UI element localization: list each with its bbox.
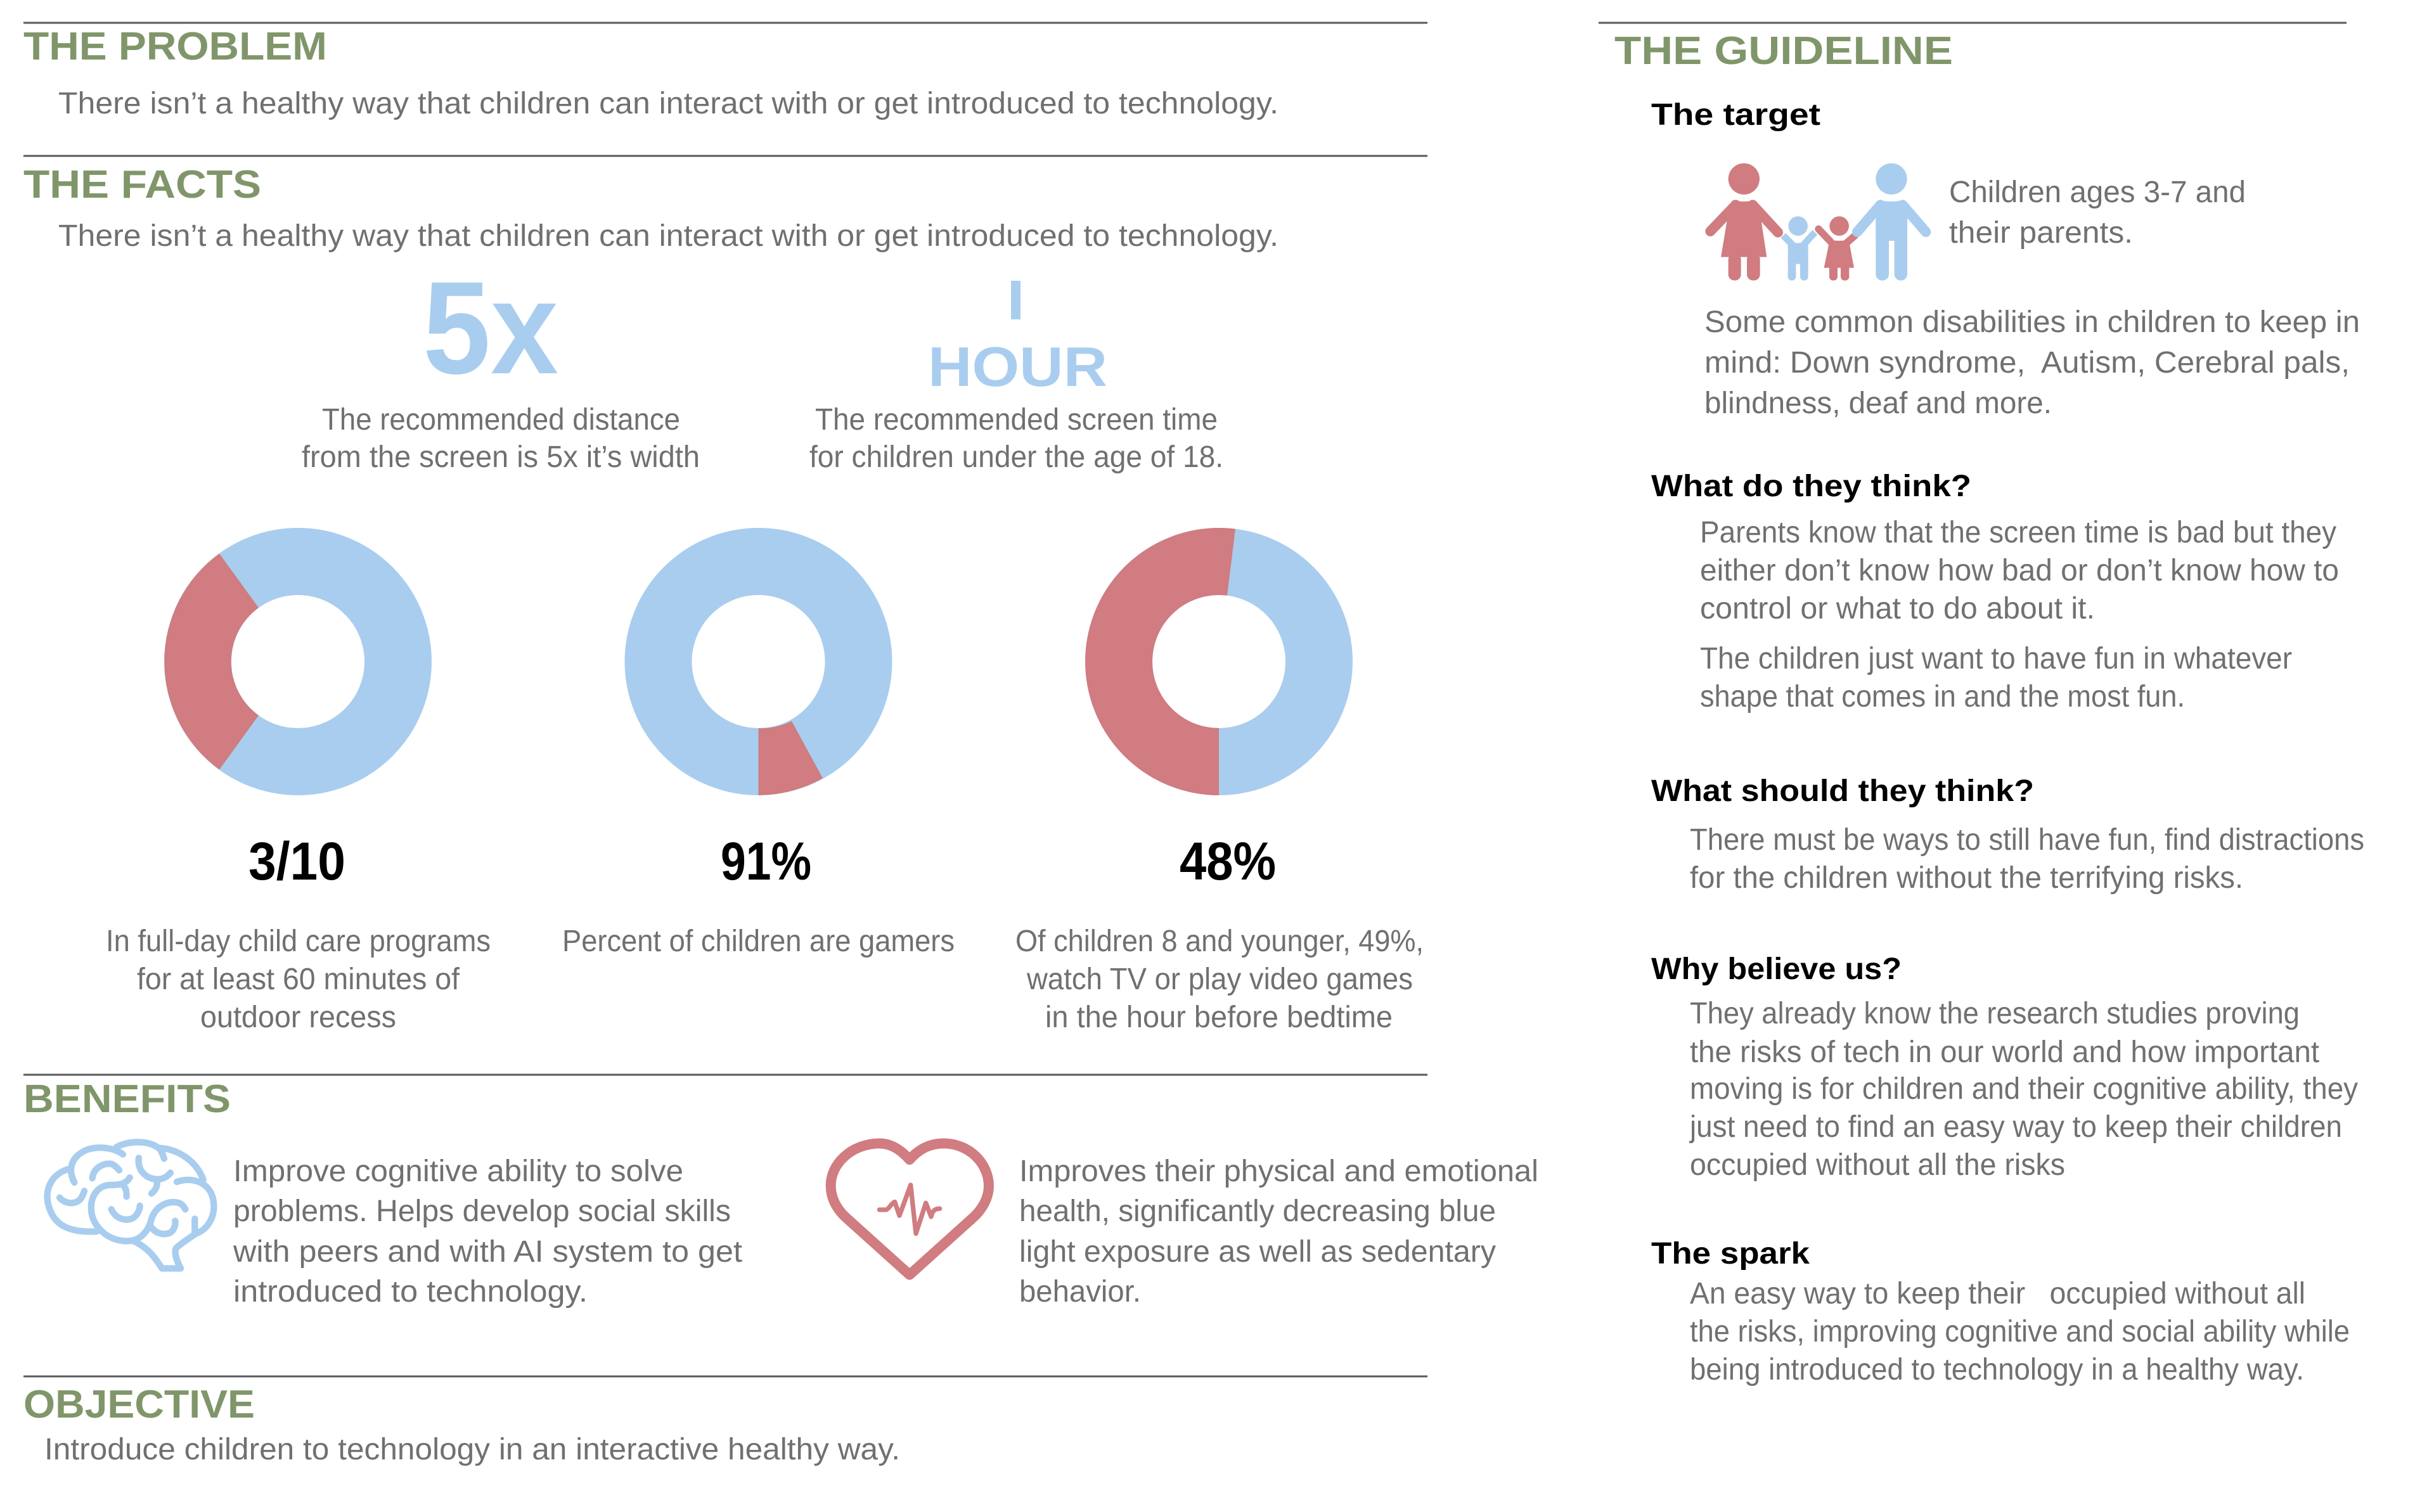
- parents think text: Parents know that the screen time is bad but they: [1700, 516, 2336, 549]
- donut chart: 48%: [1085, 528, 1319, 795]
- parents think text: either don’t know how bad or don’t know how to: [1700, 554, 2339, 587]
- screen time caption: The recommended screen time: [815, 403, 1218, 437]
- subheading: why believe us: Why believe us?: [1651, 952, 1902, 986]
- why believe us text: [1689, 997, 2358, 1182]
- target audience text: their parents.: [1949, 216, 2133, 250]
- donut chart: 91%: [658, 561, 858, 795]
- distance caption: [302, 403, 700, 474]
- donut chart: 3/10: [164, 554, 398, 769]
- why believe us text: occupied without all the risks: [1690, 1148, 2065, 1182]
- screen time caption: for children under the age of 18.: [809, 440, 1223, 474]
- benefit text: cognitive: with peers and with AI system to get: [233, 1235, 742, 1269]
- stat: 3/10: 3/10: [248, 831, 345, 891]
- the spark text: An easy way to keep their occupied without all: [1690, 1277, 2305, 1310]
- why believe us text: the risks of tech in our world and how important: [1690, 1035, 2319, 1069]
- screen time caption: [809, 403, 1223, 474]
- disabilities text: blindness, deaf and more.: [1704, 387, 2052, 420]
- target audience text: [1949, 176, 2246, 250]
- panel: the guideline: [1614, 29, 2364, 1387]
- the spark text: being introduced to technology in a healthy way.: [1690, 1353, 2304, 1387]
- icon: brain: [48, 1142, 214, 1269]
- heading: objective: OBJECTIVE: [23, 1383, 255, 1426]
- what should they think text: [1690, 823, 2364, 895]
- icon: heart with pulse: [831, 1143, 989, 1275]
- subheading: the target: The target: [1651, 98, 1820, 132]
- what should they think text: for the children without the terrifying risks.: [1690, 861, 2243, 895]
- objective statement: Introduce children to technology in an interactive healthy way.: [44, 1433, 900, 1466]
- benefit text: health: behavior.: [1019, 1275, 1141, 1309]
- target audience text: Children ages 3-7 and: [1949, 176, 2246, 209]
- subheading: what should they think: What should they think?: [1651, 774, 2034, 808]
- icon: family: [1710, 163, 1926, 281]
- benefit text: health: [1019, 1155, 1538, 1309]
- why believe us text: moving is for children and their cognitive ability, they: [1690, 1072, 2358, 1106]
- panel: the facts: [23, 163, 1424, 1034]
- caption: bedtime: watch TV or play video games: [1026, 963, 1413, 996]
- heading: benefits: BENEFITS: [23, 1077, 231, 1121]
- heading: the guideline: THE GUIDELINE: [1614, 29, 1953, 73]
- subheading: the spark: The spark: [1651, 1237, 1810, 1271]
- caption: bedtime: Of children 8 and younger, 49%,: [1015, 925, 1424, 958]
- disabilities text: mind: Down syndrome, Autism, Cerebral pals,: [1704, 346, 2350, 380]
- children think text: [1700, 642, 2292, 714]
- heading: the problem: THE PROBLEM: [23, 25, 327, 68]
- benefit text: cognitive: problems. Helps develop social skills: [233, 1195, 731, 1228]
- panel: objective: [23, 1383, 900, 1466]
- the spark text: the risks, improving cognitive and social ability while: [1690, 1315, 2350, 1349]
- disabilities text: Some common disabilities in children to keep in: [1704, 305, 2360, 339]
- big word hour: HOUR: [928, 335, 1107, 398]
- caption: recess: [106, 925, 491, 1034]
- disabilities text: [1704, 305, 2360, 420]
- parents think text: control or what to do about it.: [1700, 592, 2095, 625]
- distance caption: The recommended distance: [322, 403, 680, 437]
- distance caption: from the screen is 5x it’s width: [302, 440, 700, 474]
- children think text: The children just want to have fun in whatever: [1700, 642, 2292, 676]
- heading: the facts: THE FACTS: [23, 163, 261, 207]
- benefit text: health: light exposure as well as sedentary: [1019, 1235, 1496, 1269]
- why believe us text: They already know the research studies proving: [1690, 997, 2300, 1030]
- big number 1: 1: [994, 266, 1034, 347]
- caption: bedtime: [1015, 925, 1424, 1034]
- problem statement: There isn’t a healthy way that children can interact with or get introduced to technology.: [58, 87, 1278, 120]
- benefit text: health: health, significantly decreasing blue: [1019, 1195, 1496, 1228]
- facts intro: There isn’t a healthy way that children can interact with or get introduced to technology.: [58, 219, 1278, 253]
- caption: recess: outdoor recess: [200, 1001, 396, 1034]
- benefit text: cognitive: [233, 1155, 742, 1309]
- stat: 48%: 48%: [1180, 831, 1276, 891]
- panel: benefits: [23, 1077, 1538, 1309]
- stat: 5x distance: [302, 255, 700, 474]
- stat: 1 hour: [809, 266, 1223, 474]
- panel: the problem: [23, 25, 1278, 120]
- the spark text: [1690, 1277, 2350, 1387]
- caption: recess: In full-day child care programs: [106, 925, 491, 958]
- benefit text: cognitive: Improve cognitive ability to solve: [233, 1155, 683, 1188]
- big number 5x: 5x: [423, 255, 558, 402]
- stat: 91%: 91%: [721, 831, 811, 891]
- what should they think text: There must be ways to still have fun, find distractions: [1690, 823, 2364, 857]
- caption: bedtime: in the hour before bedtime: [1045, 1001, 1393, 1034]
- benefit text: cognitive: introduced to technology.: [233, 1275, 588, 1309]
- benefit text: health: Improves their physical and emotional: [1019, 1155, 1538, 1188]
- why believe us text: just need to find an easy way to keep their children: [1689, 1110, 2342, 1144]
- caption: recess: for at least 60 minutes of: [137, 963, 460, 996]
- caption: gamers: Percent of children are gamers: [562, 925, 955, 958]
- children think text: shape that comes in and the most fun.: [1700, 680, 2185, 714]
- subheading: what do they think: What do they think?: [1651, 470, 1971, 503]
- parents think text: [1700, 516, 2339, 625]
